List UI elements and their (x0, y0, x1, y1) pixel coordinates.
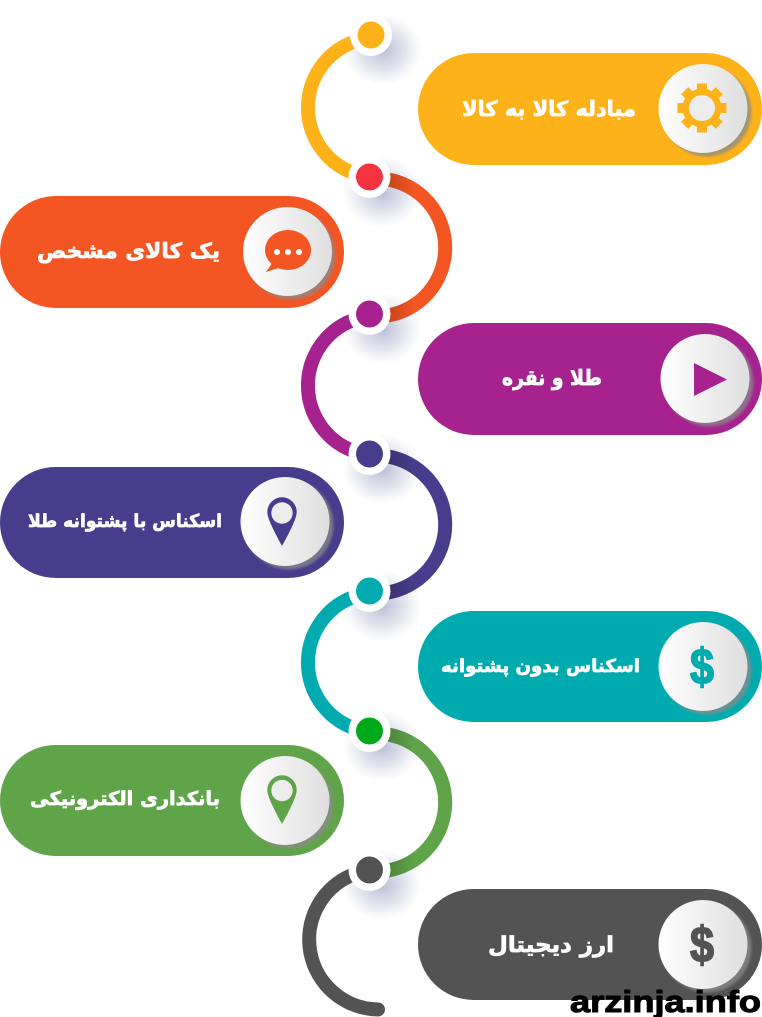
dot: yellow (350, 14, 392, 56)
connector arc: teal (308, 598, 352, 728)
connector arc: grey (309, 875, 378, 1010)
panel: e-banking (0, 745, 344, 856)
dot: grey (348, 849, 390, 891)
icon: dollar: $ (690, 917, 714, 973)
connector arc: yellow (308, 42, 352, 172)
icon: play (694, 363, 727, 396)
panel: specific commodity (0, 196, 344, 308)
label: ارز دیجیتال (488, 933, 614, 958)
icon: map pin (267, 497, 297, 546)
connector arc: orange (386, 179, 445, 316)
dot: indigo (348, 433, 390, 475)
panel: gold and silver (418, 323, 762, 435)
dot: teal (348, 570, 390, 612)
connector arc: green (386, 734, 445, 871)
label: اسکناس بدون پشتوانه (441, 656, 640, 677)
icon: gear (678, 84, 726, 132)
label: بانکداری الکترونیکی (30, 788, 220, 810)
dot: purple (348, 293, 390, 335)
icon: dollar: $ (690, 639, 714, 695)
icon: map pin (267, 775, 297, 824)
panel: unbacked banknote (418, 611, 762, 722)
dot shadows (342, 14, 423, 921)
panel: gold-backed banknote (0, 467, 344, 578)
connector arc: indigo (386, 456, 445, 593)
panel: barter (418, 53, 762, 165)
label: طلا و نقره (502, 366, 602, 390)
dot: green (348, 710, 390, 752)
icon: speech bubble (265, 230, 311, 272)
panel: digital currency (418, 889, 762, 1000)
label: یک کالای مشخص (37, 239, 220, 263)
connector arc: purple (308, 320, 352, 450)
dot: red (348, 156, 390, 198)
label: مبادله کالا به کالا (462, 97, 636, 121)
label: اسکناس با پشتوانه طلا (28, 511, 222, 532)
